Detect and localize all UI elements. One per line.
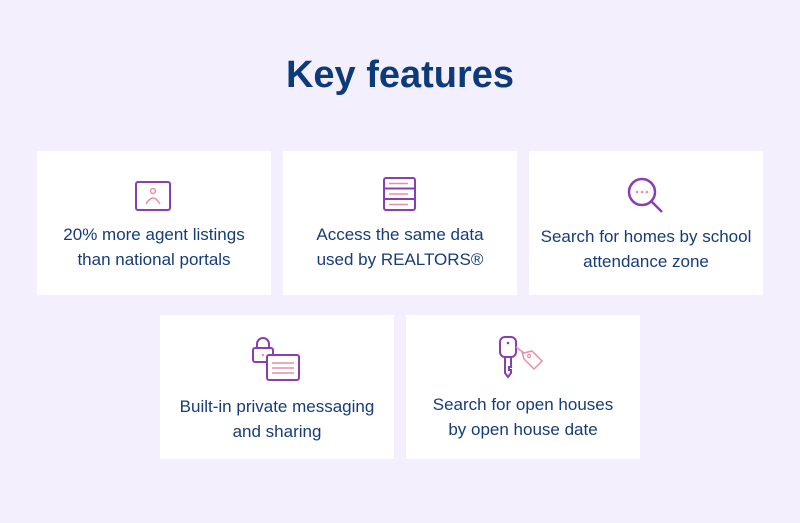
text: Access the same data: [316, 225, 484, 244]
text: [316, 225, 484, 269]
card: same data: [283, 151, 517, 295]
icon: key and tag: [499, 336, 543, 378]
text: [541, 227, 751, 271]
icon: server: [383, 177, 416, 211]
text: Built-in private messaging: [180, 397, 374, 416]
text: by open house date: [448, 420, 598, 439]
text: attendance zone: [583, 252, 709, 271]
title: Key features: [286, 54, 514, 96]
text: [180, 397, 374, 441]
text: [433, 395, 613, 439]
text: Search for open houses: [433, 395, 613, 414]
text: and sharing: [233, 422, 321, 441]
card: agent listings: [37, 151, 271, 295]
card: open houses: [406, 315, 640, 459]
text: [63, 225, 245, 269]
icon: lock and message: [252, 337, 300, 381]
card: school zone: [529, 151, 763, 295]
icon: profile card: [135, 181, 171, 211]
text: 20% more agent listings: [63, 225, 245, 244]
text: than national portals: [77, 250, 231, 269]
text: used by REALTORS®: [317, 250, 483, 269]
icon: search: [628, 178, 663, 213]
text: Search for homes by school: [541, 227, 751, 246]
card: messaging: [160, 315, 394, 459]
